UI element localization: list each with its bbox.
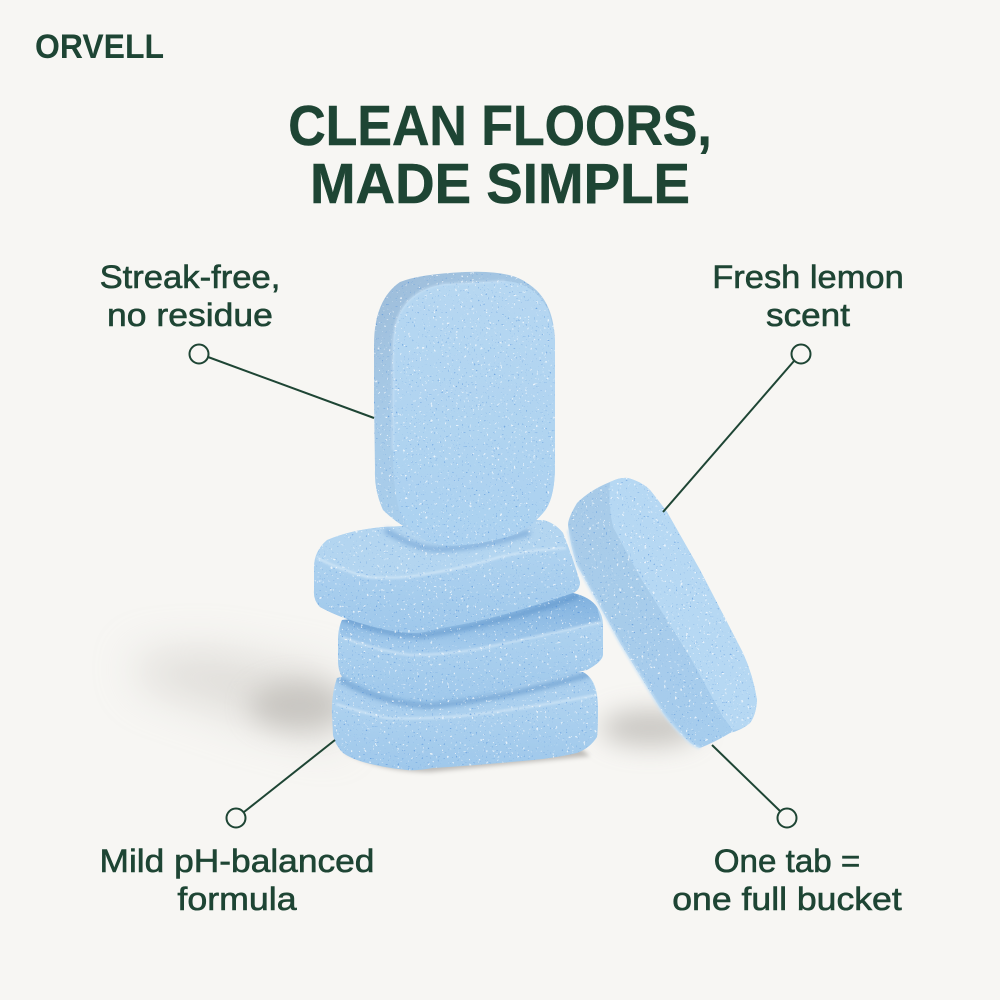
cast shadows bbox=[135, 650, 700, 772]
leader line: pH balanced bbox=[226, 740, 335, 828]
tablet: bottom of stack bbox=[332, 672, 598, 770]
brand logo: ORVELL bbox=[35, 28, 164, 66]
tablet: upright on top bbox=[374, 272, 555, 546]
leader line: streak-free bbox=[190, 344, 374, 418]
callout text: pH balanced: Mild pH-balanced bbox=[100, 843, 374, 879]
title: CLEAN FLOORS, bbox=[288, 94, 712, 158]
tablet speckle texture bbox=[300, 260, 770, 780]
tablet: third in stack bbox=[338, 593, 603, 704]
title: MADE SIMPLE bbox=[310, 152, 690, 216]
callout text: streak-free: Streak-free, bbox=[100, 259, 280, 295]
product illustration: tablets bbox=[300, 260, 770, 780]
title bbox=[288, 94, 712, 216]
callout text: one tab: one full bucket bbox=[672, 881, 902, 917]
callout text: pH balanced bbox=[100, 843, 374, 917]
callout text: one tab bbox=[672, 843, 902, 917]
leader line: lemon scent bbox=[663, 344, 810, 512]
callout text: streak-free bbox=[100, 259, 280, 333]
callout text: pH balanced: formula bbox=[177, 881, 297, 917]
tablet: second in stack bbox=[314, 520, 580, 633]
callout text: lemon scent: scent bbox=[766, 297, 850, 333]
callout text: lemon scent: Fresh lemon bbox=[712, 259, 904, 295]
leader line: one tab bbox=[712, 745, 796, 828]
tablet: leaning right bbox=[568, 478, 757, 748]
callout text: streak-free: no residue bbox=[107, 297, 273, 333]
crevice shadows bbox=[318, 596, 590, 706]
callout text: lemon scent bbox=[712, 259, 904, 333]
callout text: one tab: One tab = bbox=[714, 843, 860, 879]
